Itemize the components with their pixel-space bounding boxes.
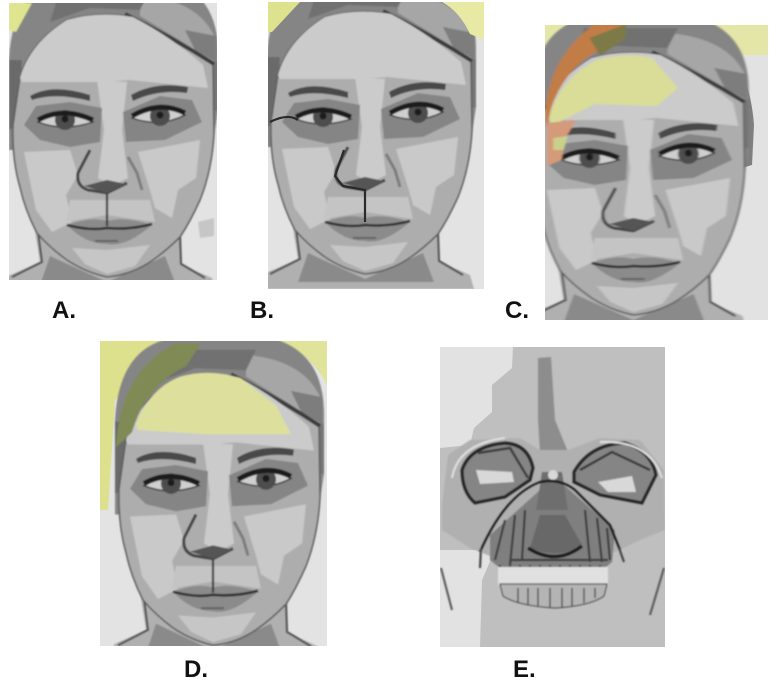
label A: A. (52, 297, 76, 324)
side retractors E (441, 568, 664, 615)
panel B: face with incision lines (266, 0, 484, 289)
bone texture E (495, 510, 610, 565)
hair extension C (744, 88, 754, 167)
hair tint D (116, 344, 201, 448)
incision lines B (270, 117, 365, 222)
panel C: face with coloured hair (545, 25, 768, 320)
forehead tint D (136, 373, 291, 434)
light background area E (440, 347, 513, 448)
yellow corners B (268, 2, 300, 32)
right orbit E (574, 443, 656, 503)
teeth E (498, 567, 608, 585)
nasal probe E (538, 357, 568, 452)
label E: E. (513, 656, 536, 683)
incision line E (480, 481, 620, 552)
background patch A (198, 218, 214, 238)
yellow corners C (545, 25, 768, 55)
nasal cavity E (530, 515, 582, 553)
forehead tint C (549, 55, 678, 126)
skull cheek and brow area E (442, 438, 665, 560)
orange hair streak C (545, 24, 626, 128)
label C: C. (505, 297, 529, 324)
yellow corners D (100, 341, 170, 510)
philtrum line D (212, 559, 214, 593)
panel A: face portrait (8, 0, 218, 292)
label B: B. (250, 297, 274, 324)
label D: D. (184, 656, 208, 683)
nasal bones E (536, 472, 568, 510)
panel D: face with tinted forehead (100, 339, 327, 661)
maxilla dark area E (490, 486, 615, 572)
philtrum line A (106, 193, 108, 226)
orbit outer rims E (452, 438, 662, 478)
coloured brow patch C (547, 120, 576, 166)
hair tint corner A (9, 3, 32, 32)
panel E: skull diagram (440, 347, 665, 647)
left orbit E (462, 443, 533, 503)
